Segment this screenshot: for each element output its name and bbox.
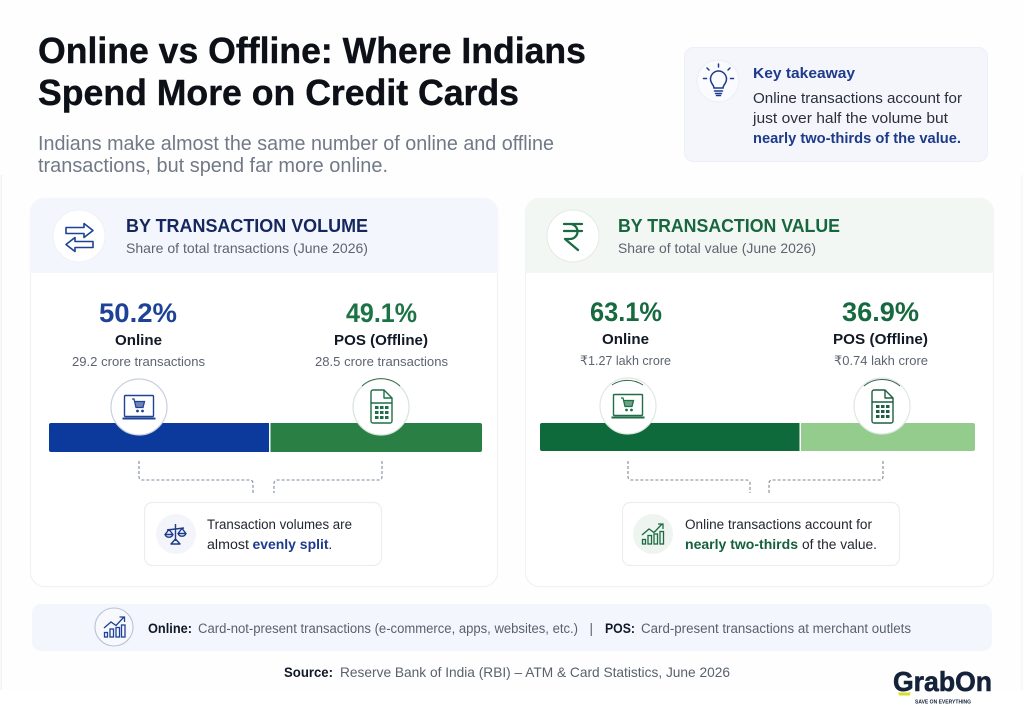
stat: POS value — [833, 297, 928, 368]
callout: nearly two-thirds — [622, 502, 900, 566]
panel header: value: Share of total value (June 2026) — [618, 240, 816, 256]
callout: key takeaway: Key takeaway — [753, 65, 856, 82]
bar chart: value split — [540, 423, 975, 451]
title: Spend More on Credit Cards — [38, 72, 519, 113]
definitions bar — [32, 604, 992, 651]
icon: POS calculator — [353, 379, 409, 435]
stat: POS value: 36.9% — [842, 297, 919, 327]
definitions bar: Card-present transactions at merchant outlets — [641, 621, 911, 636]
callout: nearly two-thirds: of the value. — [802, 537, 877, 552]
callout: nearly two-thirds: nearly two-thirds — [685, 537, 798, 552]
definitions bar: Online: — [148, 621, 192, 636]
callout: key takeaway — [684, 48, 988, 162]
definitions bar: POS: — [605, 621, 635, 636]
icon: exchange arrows — [53, 210, 105, 262]
subtitle: transactions, but spend far more online. — [38, 155, 388, 177]
icon: light bulb — [697, 60, 739, 102]
callout: nearly two-thirds: Online transactions account for — [685, 517, 872, 532]
stat: online volume: 29.2 crore transactions — [72, 354, 206, 369]
callout: evenly split: Transaction volumes are — [207, 517, 352, 532]
source line: Reserve Bank of India (RBI) – ATM & Card Statistics, June 2026 — [340, 664, 730, 680]
stat: online value: Online — [602, 331, 649, 348]
panel header: value: BY TRANSACTION VALUE — [618, 216, 840, 236]
definitions bar: Card-not-present transactions (e-commerce, apps, websites, etc.) — [198, 621, 578, 636]
connector: volume bracket — [139, 461, 382, 493]
callout: evenly split: almost — [207, 537, 249, 552]
panel: by transaction volume — [30, 198, 498, 586]
stat: POS volume: 28.5 crore transactions — [315, 354, 449, 369]
callout: key takeaway: nearly two-thirds of the value. — [753, 131, 961, 147]
stat: POS volume — [315, 298, 449, 369]
definitions bar: | — [590, 621, 593, 636]
icon: laptop cart green — [600, 378, 656, 434]
stat: online value — [580, 297, 671, 368]
callout: evenly split: evenly split — [252, 537, 329, 552]
stat: online volume: 50.2% — [99, 298, 177, 328]
icon: growth chart blue — [95, 608, 133, 646]
title: Online vs Offline: Where Indians — [38, 30, 586, 71]
stat: online value: ₹1.27 lakh crore — [580, 353, 671, 368]
title — [38, 30, 586, 113]
stat: POS volume: 49.1% — [346, 298, 417, 328]
subtitle — [38, 133, 554, 177]
callout: evenly split — [144, 502, 382, 566]
icon: rupee — [547, 210, 599, 262]
icon: growth chart green — [633, 514, 673, 554]
subtitle: Indians make almost the same number of online and offline — [38, 133, 554, 155]
panel: by transaction value — [525, 198, 994, 586]
bar chart: volume split — [49, 423, 482, 452]
icon: laptop cart — [111, 379, 167, 435]
icon: POS calculator green — [854, 378, 910, 434]
stat: online value: 63.1% — [590, 297, 662, 327]
stat: POS volume: POS (Offline) — [334, 332, 428, 349]
panel header: volume: Share of total transactions (June 2026) — [126, 240, 368, 256]
stat: online volume — [72, 298, 206, 369]
stat: POS value: POS (Offline) — [833, 331, 928, 348]
icon: balance scale — [156, 514, 196, 554]
panel header: volume: BY TRANSACTION VOLUME — [126, 216, 368, 236]
callout: evenly split: . — [328, 537, 332, 552]
logo: GrabOn: GrabOn — [893, 666, 992, 697]
callout: key takeaway: Online transactions account for — [753, 91, 962, 107]
panel header: volume — [30, 198, 498, 273]
stat: POS value: ₹0.74 lakh crore — [834, 353, 928, 368]
callout: key takeaway: just over half the volume but — [752, 111, 948, 127]
stat: online volume: Online — [115, 332, 162, 349]
connector: value bracket — [628, 461, 883, 493]
logo: GrabOn: SAVE ON EVERYTHING — [915, 700, 971, 706]
panel header: value — [525, 198, 994, 273]
source line: Source: — [284, 664, 333, 680]
